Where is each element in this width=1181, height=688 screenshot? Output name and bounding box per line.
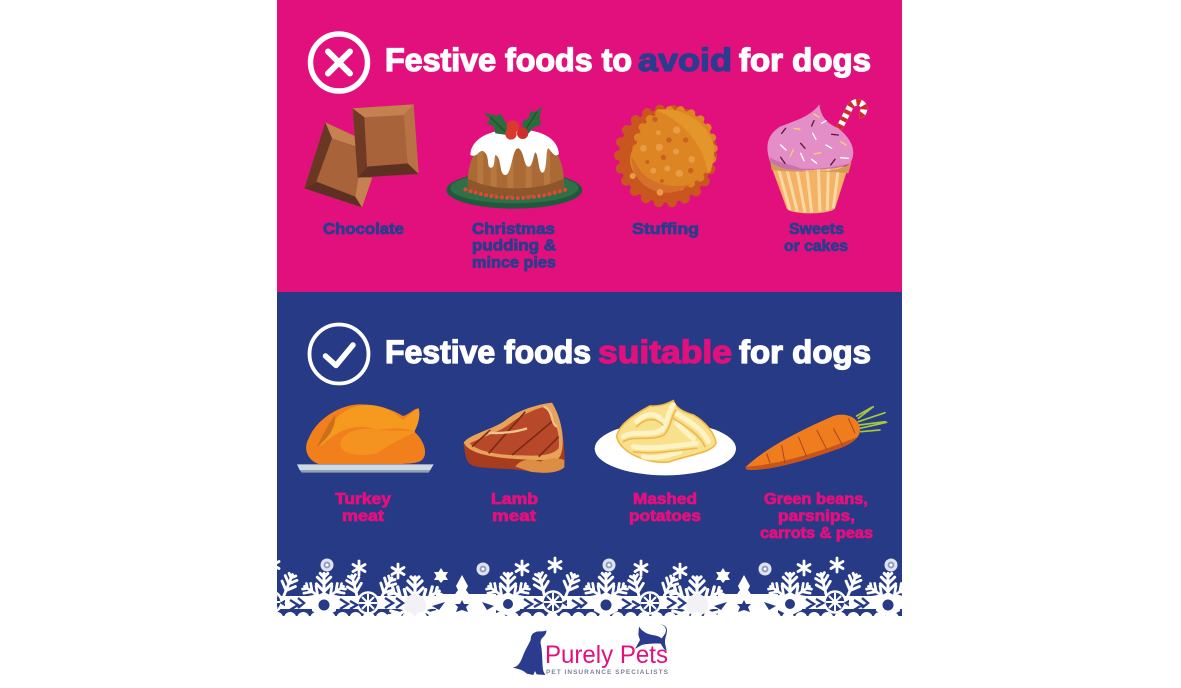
heading: foods suitable bbox=[385, 334, 871, 370]
icon: chocolate bbox=[304, 104, 419, 207]
icon: tick in circle bbox=[310, 324, 368, 384]
heading: foods to avoid bbox=[385, 42, 871, 78]
icon: carrot bbox=[746, 407, 887, 470]
label: Lamb meat: Lamb bbox=[491, 491, 538, 508]
icon: mashed potatoes bbox=[595, 401, 736, 475]
label: Mashed potatoes: Mashed bbox=[633, 491, 697, 508]
label: Green beans, parsnips, carrots and peas: carrots & peas bbox=[760, 525, 873, 542]
label: Stuffing: Stuffing bbox=[632, 221, 699, 238]
label: Turkey meat: Turkey bbox=[335, 491, 391, 508]
label: Sweets or cakes bbox=[784, 221, 848, 255]
label: Sweets or cakes: Sweets bbox=[789, 221, 844, 238]
label: Christmas pudding and mince pies: mince pies bbox=[472, 254, 556, 272]
label: Lamb meat bbox=[491, 491, 538, 525]
heading: foods suitable: Festive foods bbox=[385, 334, 591, 370]
label: Christmas pudding and mince pies: pudding & bbox=[472, 238, 556, 254]
label: Mashed potatoes: potatoes bbox=[629, 508, 701, 525]
icon: turkey bbox=[297, 404, 434, 473]
logo: Purely Pets bbox=[513, 625, 669, 676]
label: Green beans, parsnips, carrots and peas bbox=[760, 491, 873, 542]
label: Mashed potatoes bbox=[629, 491, 701, 525]
heading: foods to avoid: for dogs bbox=[739, 42, 871, 78]
icon: cross in circle bbox=[310, 34, 368, 91]
label: Chocolate: Chocolate bbox=[323, 221, 404, 238]
logo wordmark: Purely Pets bbox=[545, 641, 668, 669]
icon: stuffing bbox=[619, 109, 714, 203]
icon: cat silhouette bbox=[635, 625, 667, 651]
label: Turkey meat bbox=[335, 491, 391, 525]
label: Lamb meat: meat bbox=[492, 508, 536, 525]
heading: foods to avoid: avoid bbox=[638, 42, 732, 78]
label: Turkey meat: meat bbox=[342, 508, 384, 525]
heading: foods suitable: suitable bbox=[598, 334, 732, 370]
icon: steak bbox=[464, 403, 565, 473]
heading: foods to avoid: Festive foods to bbox=[385, 42, 632, 78]
icon: dog silhouette bbox=[513, 630, 546, 675]
label: Christmas pudding and mince pies: Christmas bbox=[472, 221, 555, 238]
panel: foods to avoid bbox=[277, 0, 902, 292]
icon: Christmas pudding bbox=[446, 106, 582, 209]
logo tagline: PET INSURANCE SPECIALISTS bbox=[546, 669, 669, 676]
panel: foods suitable bbox=[277, 292, 902, 616]
label: Christmas pudding and mince pies bbox=[472, 221, 556, 272]
heading: foods suitable: for dogs bbox=[739, 334, 871, 370]
label: Green beans, parsnips, carrots and peas: parsnips, bbox=[778, 508, 855, 525]
snowflake border bbox=[277, 556, 902, 616]
label: Sweets or cakes: or cakes bbox=[784, 238, 848, 255]
label: Green beans, parsnips, carrots and peas: Green beans, bbox=[764, 491, 868, 508]
icon: cupcake bbox=[767, 102, 864, 213]
